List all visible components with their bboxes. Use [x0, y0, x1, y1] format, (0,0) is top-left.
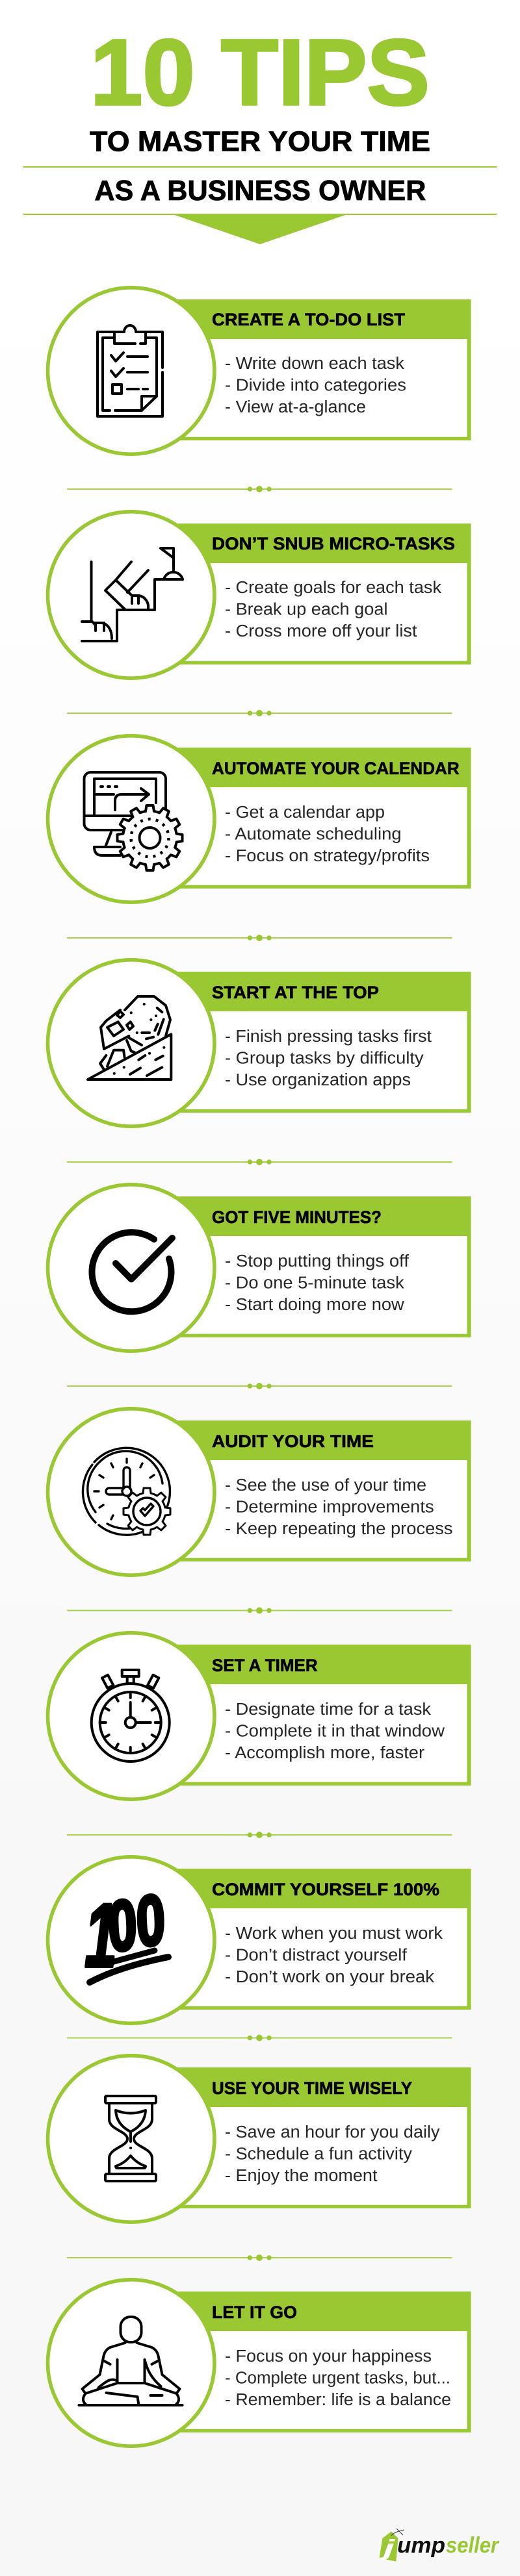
circle	[48, 1633, 214, 1799]
card 10: let it go	[48, 2280, 471, 2446]
bullet list	[225, 579, 441, 640]
bullet list: - Group tasks by difficulty	[225, 1050, 424, 1068]
bullet list: - Divide into categories	[225, 377, 406, 395]
heading: SET A TIMER	[212, 1656, 318, 1675]
circle	[48, 1857, 214, 2023]
title: 10 TIPS	[90, 20, 430, 125]
logo: jumpseller: seller	[446, 2533, 500, 2558]
panel frame	[131, 524, 471, 664]
logo: jumpseller: ump	[397, 2533, 445, 2558]
icon: 100 underlined: 00	[101, 1879, 171, 1967]
card 1: create a to-do list	[48, 288, 471, 454]
logo: jumpseller	[379, 2529, 500, 2561]
bullet list	[225, 1925, 443, 1986]
bullet list: - Break up each goal	[225, 600, 387, 618]
bullet list	[225, 2123, 440, 2185]
circle	[48, 1185, 214, 1351]
bullet list	[225, 1252, 410, 1314]
panel frame	[131, 1645, 471, 1786]
heading: LET IT GO	[212, 2303, 297, 2322]
circle	[48, 512, 214, 678]
card 2: don't snub micro-tasks	[48, 512, 471, 678]
card 6: audit your time	[48, 1409, 471, 1575]
panel frame	[131, 2292, 471, 2432]
icon: clipboard checklist	[98, 325, 162, 416]
bullet list: - Cross more off your list	[225, 622, 417, 640]
bullet list: - Focus on your happiness	[225, 2347, 432, 2366]
bullet list: - Designate time for a task	[225, 1700, 431, 1719]
card 8: commit yourself 100%	[48, 1857, 471, 2023]
bullet list: - Create goals for each task	[225, 579, 441, 597]
bullet list	[225, 1028, 432, 1089]
heading: DON’T SNUB MICRO-TASKS	[212, 534, 455, 553]
panel frame	[131, 1869, 471, 2010]
heading: GOT FIVE MINUTES?	[212, 1207, 382, 1227]
bullet list: - Work when you must work	[225, 1925, 443, 1943]
heading: USE YOUR TIME WISELY	[212, 2078, 412, 2098]
bullet list: - Stop putting things off	[225, 1252, 410, 1270]
subtitle line 2: AS A BUSINESS OWNER	[94, 175, 426, 207]
card 5: got five minutes?	[48, 1185, 471, 1351]
icon: hourglass	[105, 2096, 156, 2181]
icon: person meditating	[79, 2317, 182, 2405]
circle	[48, 2056, 214, 2222]
bullet list: - Write down each task	[225, 355, 404, 373]
bullet list: - Don’t work on your break	[225, 1968, 434, 1986]
subtitle line 1: TO MASTER YOUR TIME	[90, 126, 430, 158]
circle	[48, 960, 214, 1126]
logo: jumpseller: j	[379, 2536, 396, 2560]
icon: clock with gear	[83, 1448, 170, 1535]
panel frame	[131, 299, 471, 440]
heading: COMMIT YOURSELF 100%	[212, 1880, 439, 1899]
panel frame	[131, 2067, 471, 2208]
bullet list: - Schedule a fun activity	[225, 2145, 412, 2163]
icon: stairs and flag	[82, 548, 183, 641]
bullet list	[225, 1700, 445, 1762]
heading: CREATE A TO-DO LIST	[212, 310, 406, 329]
circle	[48, 288, 214, 454]
icon: check mark in circle	[92, 1232, 172, 1311]
bullet list: - Complete urgent tasks, but...	[225, 2369, 450, 2388]
bullet list: - Save an hour for you daily	[225, 2123, 440, 2141]
icon: stopwatch	[92, 1670, 170, 1762]
bullet list: - Do one 5-minute task	[225, 1274, 404, 1293]
bullet list	[225, 2347, 451, 2409]
icon: 100 underlined: 1	[84, 1884, 117, 1986]
bullet list: - Determine improvements	[225, 1498, 434, 1516]
bullet list	[225, 355, 406, 416]
icon: monitor and gear	[84, 772, 183, 871]
bullet list: - Complete it in that window	[225, 1723, 445, 1741]
circle	[48, 736, 214, 902]
arrow: down	[171, 214, 349, 244]
panel frame	[131, 972, 471, 1113]
icon: price tag	[380, 2532, 398, 2561]
panel frame	[131, 748, 471, 889]
bullet list: - Enjoy the moment	[225, 2167, 377, 2185]
bullet list: - See the use of your time	[225, 1476, 426, 1495]
bullet list: - Don’t distract yourself	[225, 1946, 408, 1964]
panel frame	[131, 1196, 471, 1337]
bullet list	[225, 1476, 453, 1538]
icon: person pushing boulder uphill	[88, 996, 171, 1080]
bullet list: - Use organization apps	[225, 1071, 411, 1089]
bullet list	[225, 803, 430, 865]
bullet list: - View at-a-glance	[225, 398, 366, 416]
circle	[48, 2280, 214, 2446]
bullet list: - Accomplish more, faster	[225, 1744, 425, 1762]
bullet list: - Automate scheduling	[225, 825, 402, 843]
card 7: set a timer	[48, 1633, 471, 1799]
heading: AUDIT YOUR TIME	[212, 1432, 374, 1451]
bullet list: - Start doing more now	[225, 1296, 404, 1314]
panel frame	[131, 1421, 471, 1561]
heading: AUTOMATE YOUR CALENDAR	[212, 759, 460, 778]
bullet list: - Focus on strategy/profits	[225, 847, 430, 865]
card 9: use your time wisely	[48, 2056, 471, 2222]
card 4: start at the top	[48, 960, 471, 1126]
circle	[48, 1409, 214, 1575]
heading: START AT THE TOP	[212, 983, 379, 1002]
bullet list: - Remember: life is a balance	[225, 2391, 451, 2409]
bullet list: - Finish pressing tasks first	[225, 1028, 432, 1046]
icon: 100 underlined	[84, 1879, 171, 1986]
bullet list: - Get a calendar app	[225, 803, 385, 822]
bullet list: - Keep repeating the process	[225, 1520, 453, 1538]
card 3: automate your calendar	[48, 736, 471, 902]
